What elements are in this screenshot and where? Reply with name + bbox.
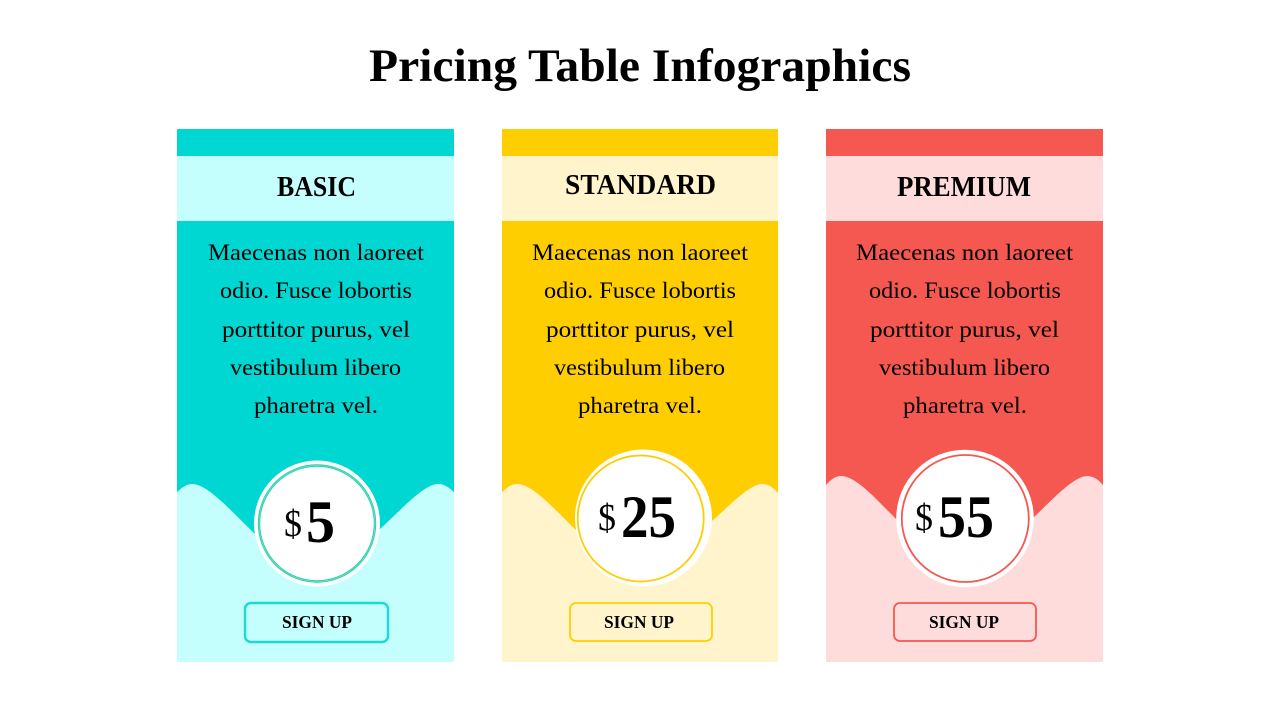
description text: pharetra vel.	[578, 393, 702, 419]
price: 5 dollars: 5	[306, 489, 335, 555]
price: 5 dollars	[284, 489, 335, 555]
body background	[826, 221, 1103, 561]
wave footer	[177, 484, 454, 662]
body background	[502, 221, 778, 561]
price circle	[575, 450, 712, 586]
sign up button: SIGN UP	[929, 612, 999, 632]
header strip	[502, 156, 778, 221]
description text: Maecenas non laoreet	[856, 240, 1073, 266]
wave footer	[826, 476, 1103, 662]
description text: vestibulum libero	[879, 355, 1050, 381]
description text: odio. Fusce lobortis	[544, 278, 736, 304]
panel: basic plan	[177, 129, 454, 662]
sign up button	[570, 603, 712, 641]
description text	[532, 240, 748, 419]
body background	[177, 221, 454, 561]
price: 25 dollars: $	[598, 497, 616, 539]
description text	[856, 240, 1073, 419]
price: 55 dollars	[915, 484, 994, 550]
top colour band	[177, 129, 454, 156]
price: 55 dollars: $	[915, 497, 933, 539]
panel: standard plan	[502, 129, 778, 662]
description text: odio. Fusce lobortis	[869, 278, 1061, 304]
price: 5 dollars: $	[284, 503, 302, 545]
top colour band	[826, 129, 1103, 156]
heading: basic: BASIC	[277, 172, 356, 203]
description text: pharetra vel.	[254, 393, 378, 419]
panel: premium plan	[826, 129, 1103, 662]
sign up button: SIGN UP	[282, 612, 352, 632]
sign up button: SIGN UP	[604, 612, 674, 632]
price: 55 dollars: 55	[938, 484, 994, 550]
description text	[208, 240, 424, 419]
sign up button	[245, 603, 388, 642]
heading: standard: STANDARD	[565, 170, 716, 201]
description text: Maecenas non laoreet	[532, 240, 748, 266]
wave footer	[502, 484, 778, 662]
heading: premium: PREMIUM	[897, 172, 1031, 203]
description text: Maecenas non laoreet	[208, 240, 424, 266]
sign up button	[894, 603, 1036, 641]
description text: porttitor purus, vel	[222, 317, 410, 343]
top colour band	[502, 129, 778, 156]
title: Pricing Table Infographics	[369, 40, 911, 92]
price: 25 dollars	[598, 484, 676, 550]
description text: porttitor purus, vel	[870, 317, 1060, 343]
price circle	[896, 450, 1034, 587]
description text: odio. Fusce lobortis	[220, 278, 412, 304]
description text: vestibulum libero	[554, 355, 725, 381]
description text: vestibulum libero	[230, 355, 401, 381]
price circle	[254, 460, 380, 586]
description text: porttitor purus, vel	[546, 317, 734, 343]
header strip	[177, 156, 454, 221]
description text: pharetra vel.	[903, 393, 1027, 419]
price: 25 dollars: 25	[621, 484, 676, 550]
header strip	[826, 156, 1103, 221]
